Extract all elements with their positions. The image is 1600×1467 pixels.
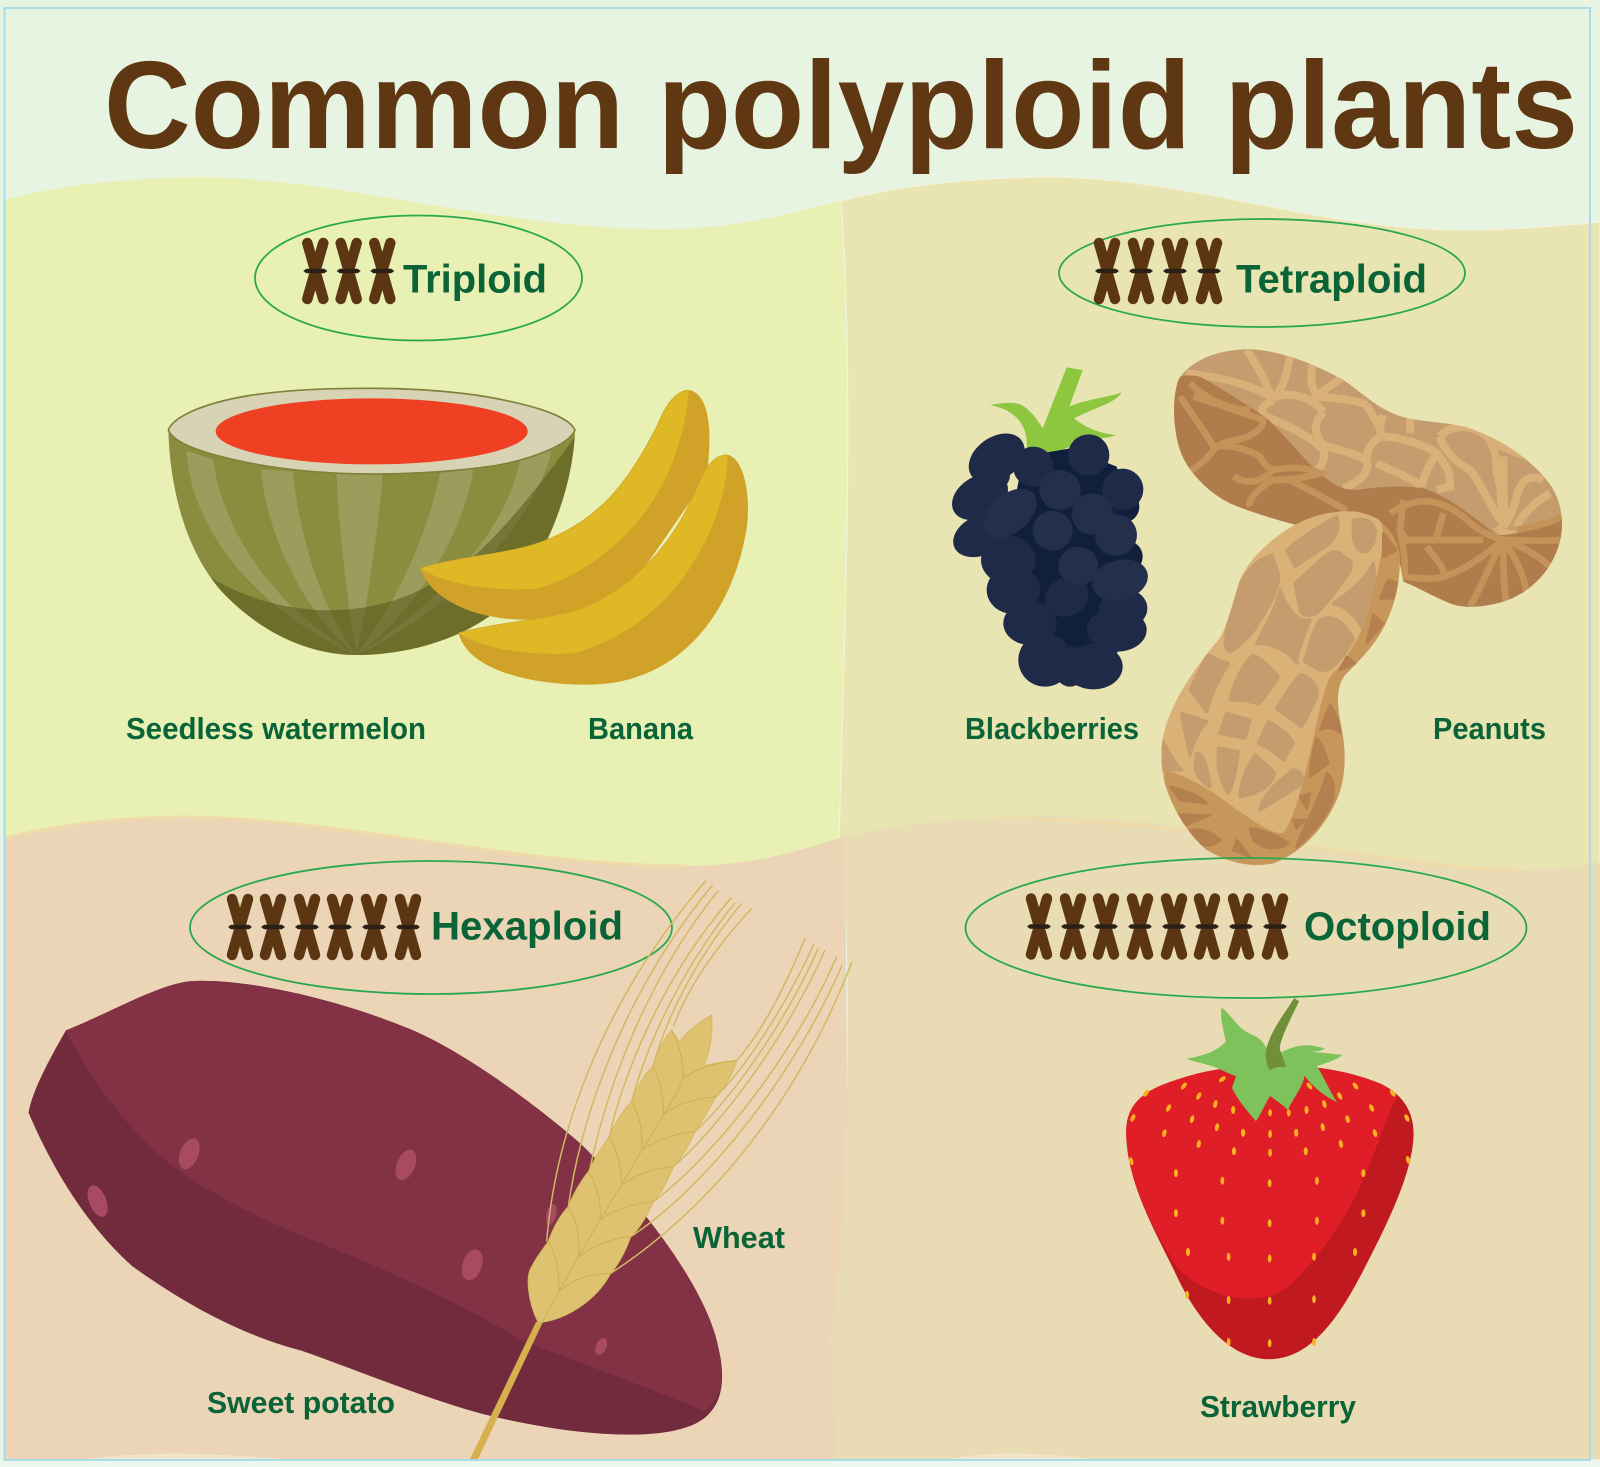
top peanut	[1174, 349, 1562, 607]
panel: hexaploid background	[5, 817, 850, 1459]
triploid label group	[255, 216, 582, 340]
strawberry seeds	[1128, 1075, 1411, 1347]
panel: triploid background	[5, 177, 860, 880]
label: strawberry: Strawberry	[1200, 1389, 1357, 1424]
strawberry illustration	[1126, 998, 1414, 1359]
label: sweet potato: Sweet potato	[207, 1385, 395, 1420]
panel: octoploid background	[830, 816, 1600, 1459]
strawberry stem	[1266, 998, 1299, 1070]
peanut illustration	[1153, 340, 1577, 870]
wheat awns	[547, 881, 852, 1273]
sweet potato illustration	[29, 981, 722, 1435]
hexaploid label group: Hexaploid	[431, 904, 623, 948]
octoploid label group	[966, 858, 1526, 998]
label: peanuts: Peanuts	[1433, 711, 1546, 746]
watermelon illustration	[168, 388, 580, 680]
triploid label group: Triploid	[403, 258, 547, 302]
wheat grain head	[528, 1015, 737, 1323]
banana illustration	[421, 391, 747, 684]
tetraploid label group: Tetraploid	[1236, 258, 1427, 302]
blackberry illustration	[944, 367, 1153, 689]
wheat illustration	[470, 881, 852, 1459]
strawberry calyx	[1186, 1007, 1343, 1121]
label: seedless watermelon: Seedless watermelon	[126, 711, 426, 746]
label: banana: Banana	[588, 711, 694, 746]
octoploid label group: Octoploid	[1304, 905, 1491, 949]
label: blackberries: Blackberries	[965, 711, 1139, 746]
panel: tetraploid background	[838, 177, 1600, 880]
bottom peanut	[1162, 511, 1400, 865]
wheat stem	[470, 1322, 543, 1459]
title: Common polyploid plants	[104, 37, 1578, 175]
hexaploid label group	[190, 861, 672, 994]
tetraploid label group	[1059, 219, 1465, 327]
label: wheat: Wheat	[693, 1220, 785, 1255]
